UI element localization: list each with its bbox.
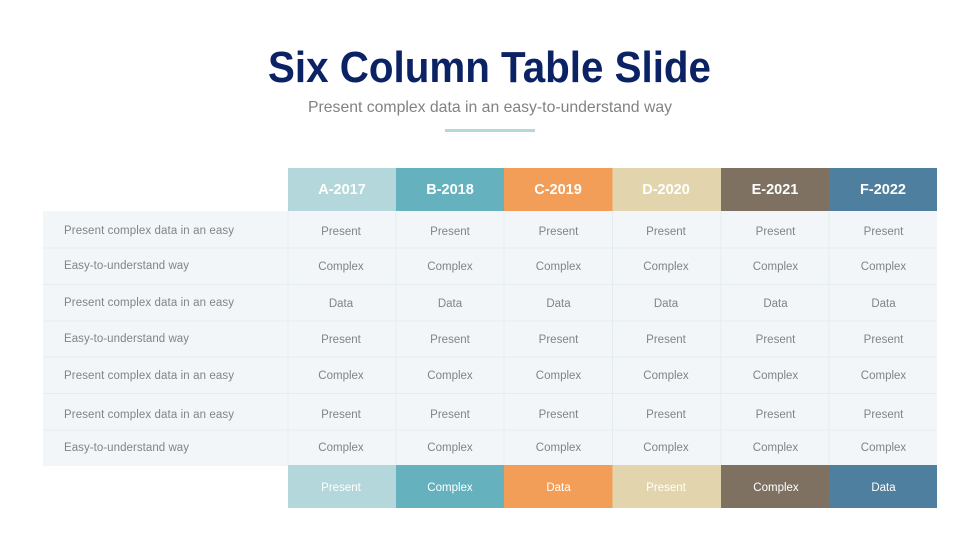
footer row (288, 465, 937, 508)
row labels: Present complex data in an easy (64, 409, 234, 421)
column C values: Present (539, 334, 579, 346)
column C values: Complex (536, 261, 581, 273)
header row: C-2019 (534, 182, 582, 198)
column A values: Complex (318, 442, 364, 454)
accent underline (445, 129, 535, 132)
column F values: Complex (861, 442, 906, 454)
column B values: Present (430, 409, 471, 421)
column E values: Present (756, 409, 796, 421)
footer row: Present (646, 482, 687, 494)
column D values (643, 226, 689, 454)
column B values: Present (430, 226, 471, 238)
header row: A-2017 (318, 182, 366, 198)
table (43, 168, 937, 508)
footer row: Data (546, 482, 571, 494)
column B values: Complex (427, 442, 473, 454)
column E values: Present (756, 226, 796, 238)
footer row: Complex (753, 482, 799, 494)
column C values: Data (546, 298, 571, 310)
column D values: Complex (643, 261, 689, 273)
column C values: Present (539, 226, 579, 238)
column D values: Present (646, 334, 687, 346)
column C values: Present (539, 409, 579, 421)
column E values: Complex (753, 442, 798, 454)
column D values: Present (646, 226, 687, 238)
column B values: Present (430, 334, 471, 346)
header row: F-2022 (860, 182, 906, 198)
column F values: Data (871, 298, 896, 310)
column E values: Complex (753, 370, 798, 382)
column E values: Complex (753, 261, 798, 273)
column F values: Complex (861, 370, 906, 382)
footer row: Complex (427, 482, 473, 494)
column E values: Data (763, 298, 788, 310)
column D values: Data (654, 298, 679, 310)
row labels: Easy-to-understand way (64, 442, 189, 454)
column A values: Complex (318, 261, 364, 273)
row labels: Present complex data in an easy (64, 297, 234, 309)
column E values: Present (756, 334, 796, 346)
column A values: Data (329, 298, 354, 310)
row labels: Present complex data in an easy (64, 370, 234, 382)
subtitle: Present complex data in an easy-to-understand way (308, 99, 672, 116)
column A values: Present (321, 226, 362, 238)
column B values: Data (438, 298, 463, 310)
column F values: Present (864, 334, 904, 346)
column D values: Complex (643, 370, 689, 382)
column D values: Present (646, 409, 687, 421)
column F values (861, 226, 906, 454)
title: Six Column Table Slide (268, 43, 711, 92)
column F values: Present (864, 226, 904, 238)
row labels (64, 225, 234, 454)
column B values (427, 226, 473, 454)
header row: B-2018 (426, 182, 474, 198)
column B values: Complex (427, 370, 473, 382)
header row: E-2021 (752, 182, 798, 198)
column A values: Present (321, 334, 362, 346)
column B values: Complex (427, 261, 473, 273)
row labels: Easy-to-understand way (64, 333, 189, 345)
column D values: Complex (643, 442, 689, 454)
footer row: Present (321, 482, 362, 494)
column A values: Present (321, 409, 362, 421)
header row (288, 168, 937, 211)
column F values: Present (864, 409, 904, 421)
column C values: Complex (536, 442, 581, 454)
column E values (753, 226, 798, 454)
column A values (318, 226, 364, 454)
header row: D-2020 (642, 182, 690, 198)
row labels: Easy-to-understand way (64, 260, 189, 272)
column C values: Complex (536, 370, 581, 382)
column F values: Complex (861, 261, 906, 273)
table body background (43, 211, 937, 466)
column C values (536, 226, 581, 454)
footer row: Data (871, 482, 896, 494)
row labels: Present complex data in an easy (64, 225, 234, 237)
column A values: Complex (318, 370, 364, 382)
